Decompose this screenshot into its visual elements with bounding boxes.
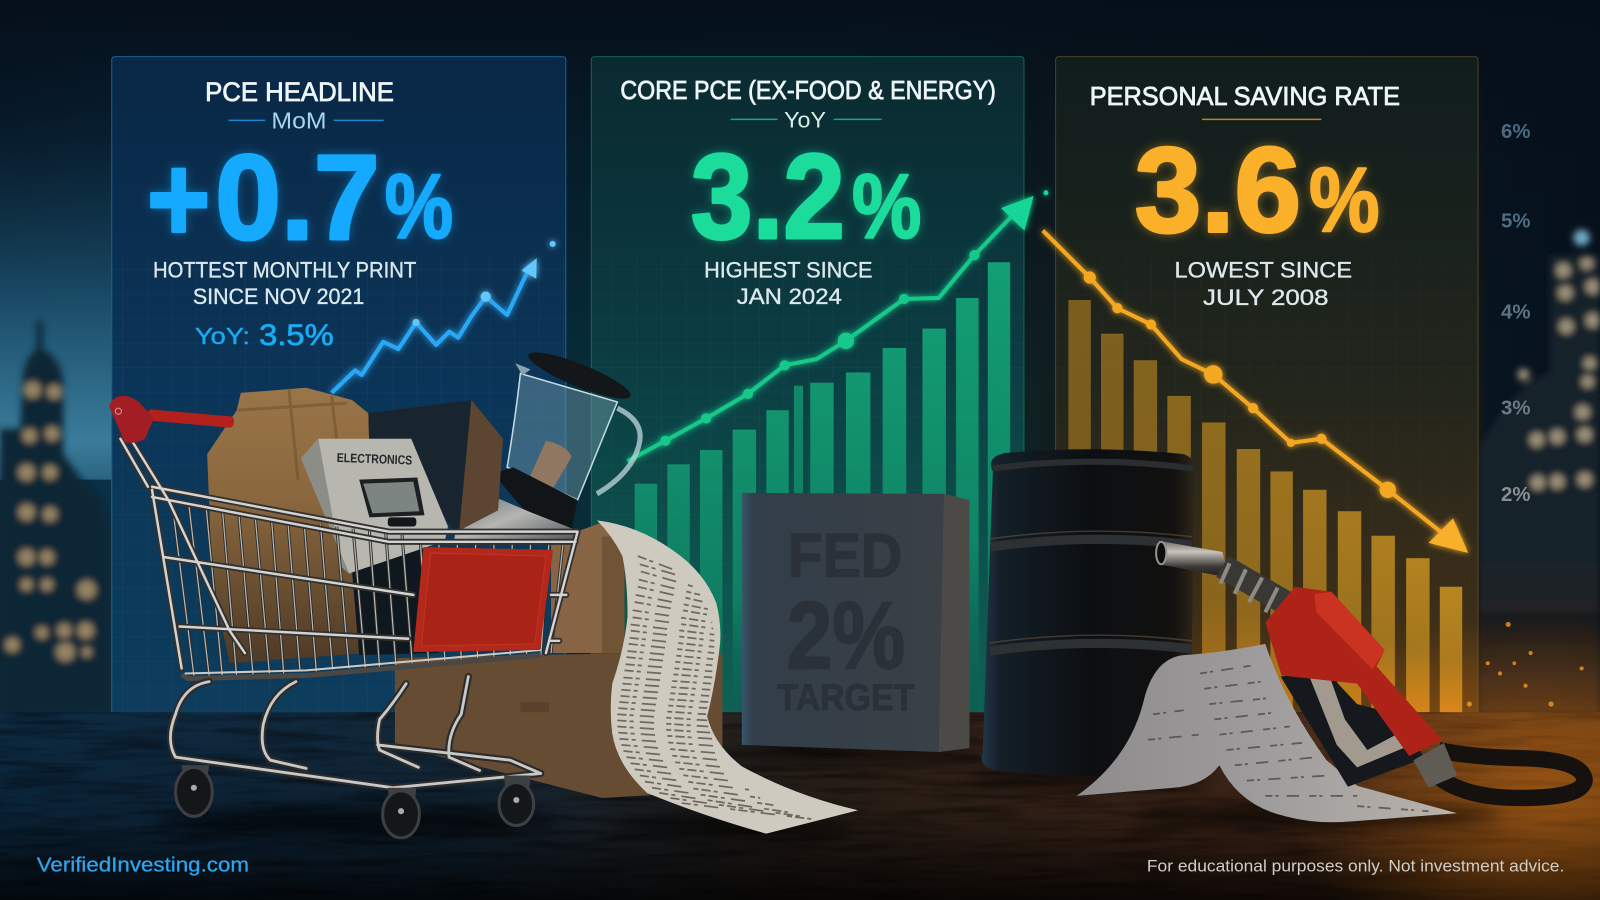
cart rails [120,434,578,668]
heading rule [1202,118,1321,120]
city skyline left [0,321,111,714]
axis labels: 2% [1501,484,1531,506]
line chart: headline rising arrow [332,241,556,393]
footer brand: VerifiedInvesting.com [37,854,249,876]
big number: 0.7 [215,130,380,265]
big number: 3.2 [691,129,845,264]
big number: 3.6 [1135,123,1301,258]
shopping cart [109,396,578,838]
panel: core PCE background [591,57,1024,715]
brown paper bag [207,388,371,663]
Fed 2% target stone block: TARGET [778,677,915,718]
big number: % [852,156,921,258]
YoY value: YoY: [195,323,250,349]
cart handle [109,396,234,443]
bar chart: core PCE [635,262,1010,714]
electronics box: ELECTRONICS [337,450,412,468]
YoY value: 3.5% [259,319,334,352]
dark shopping bag [352,400,503,655]
panel text: saving rate [1090,83,1400,310]
big number: + [147,130,210,267]
note line two: JULY 2008 [1203,285,1329,310]
YoY value [195,319,334,352]
Fed 2% target stone block: FED [788,522,902,590]
receipt: long paper roll [597,520,858,834]
Fed 2% target stone block: 2% [787,582,905,689]
panel text: core PCE [620,77,996,309]
heading: PERSONAL SAVING RATE [1090,83,1400,111]
panel text: PCE headline [147,77,453,352]
axis labels [1501,121,1531,506]
heading: CORE PCE (EX-FOOD & ENERGY) [620,77,996,105]
fuel nozzle [1156,541,1457,788]
note line two: JAN 2024 [737,284,842,309]
red cart panel [413,547,553,652]
bar chart: saving rate [1068,300,1462,714]
subheading MoM: MoM [271,108,327,134]
big number [1135,123,1380,258]
big number: % [1309,150,1380,252]
blender [454,344,640,541]
subheading YoY: YoY [784,108,826,133]
line chart: saving rate falling arrow [1043,231,1468,553]
axis labels: 4% [1501,301,1531,323]
cardboard boxes [395,522,722,798]
big number [147,130,453,267]
cart undercarriage [170,677,541,788]
big number: % [385,156,453,258]
cart basket wires [171,498,563,679]
panel: PCE headline background [112,57,566,715]
axis labels: 3% [1501,397,1531,419]
city skyline right [1479,230,1600,714]
fuel hose [1429,750,1585,798]
panel: saving rate background [1056,57,1478,715]
line chart: core PCE rising arrow [628,190,1048,461]
note: HIGHEST SINCE [704,258,872,283]
axis labels: 6% [1501,121,1531,143]
axis labels: 5% [1501,211,1531,233]
note line two: SINCE NOV 2021 [193,284,364,309]
receipt: gas receipt curl [1077,644,1457,822]
electronics box [301,439,448,573]
Fed 2% target stone block [742,493,969,752]
cart wheels [176,765,534,838]
heading: PCE HEADLINE [205,77,394,107]
note: HOTTEST MONTHLY PRINT [153,258,416,283]
note: LOWEST SINCE [1174,258,1352,283]
oil barrel [981,449,1195,776]
floor [0,510,1600,900]
disclaimer: For educational purposes only. Not investment advice. [1147,856,1564,875]
